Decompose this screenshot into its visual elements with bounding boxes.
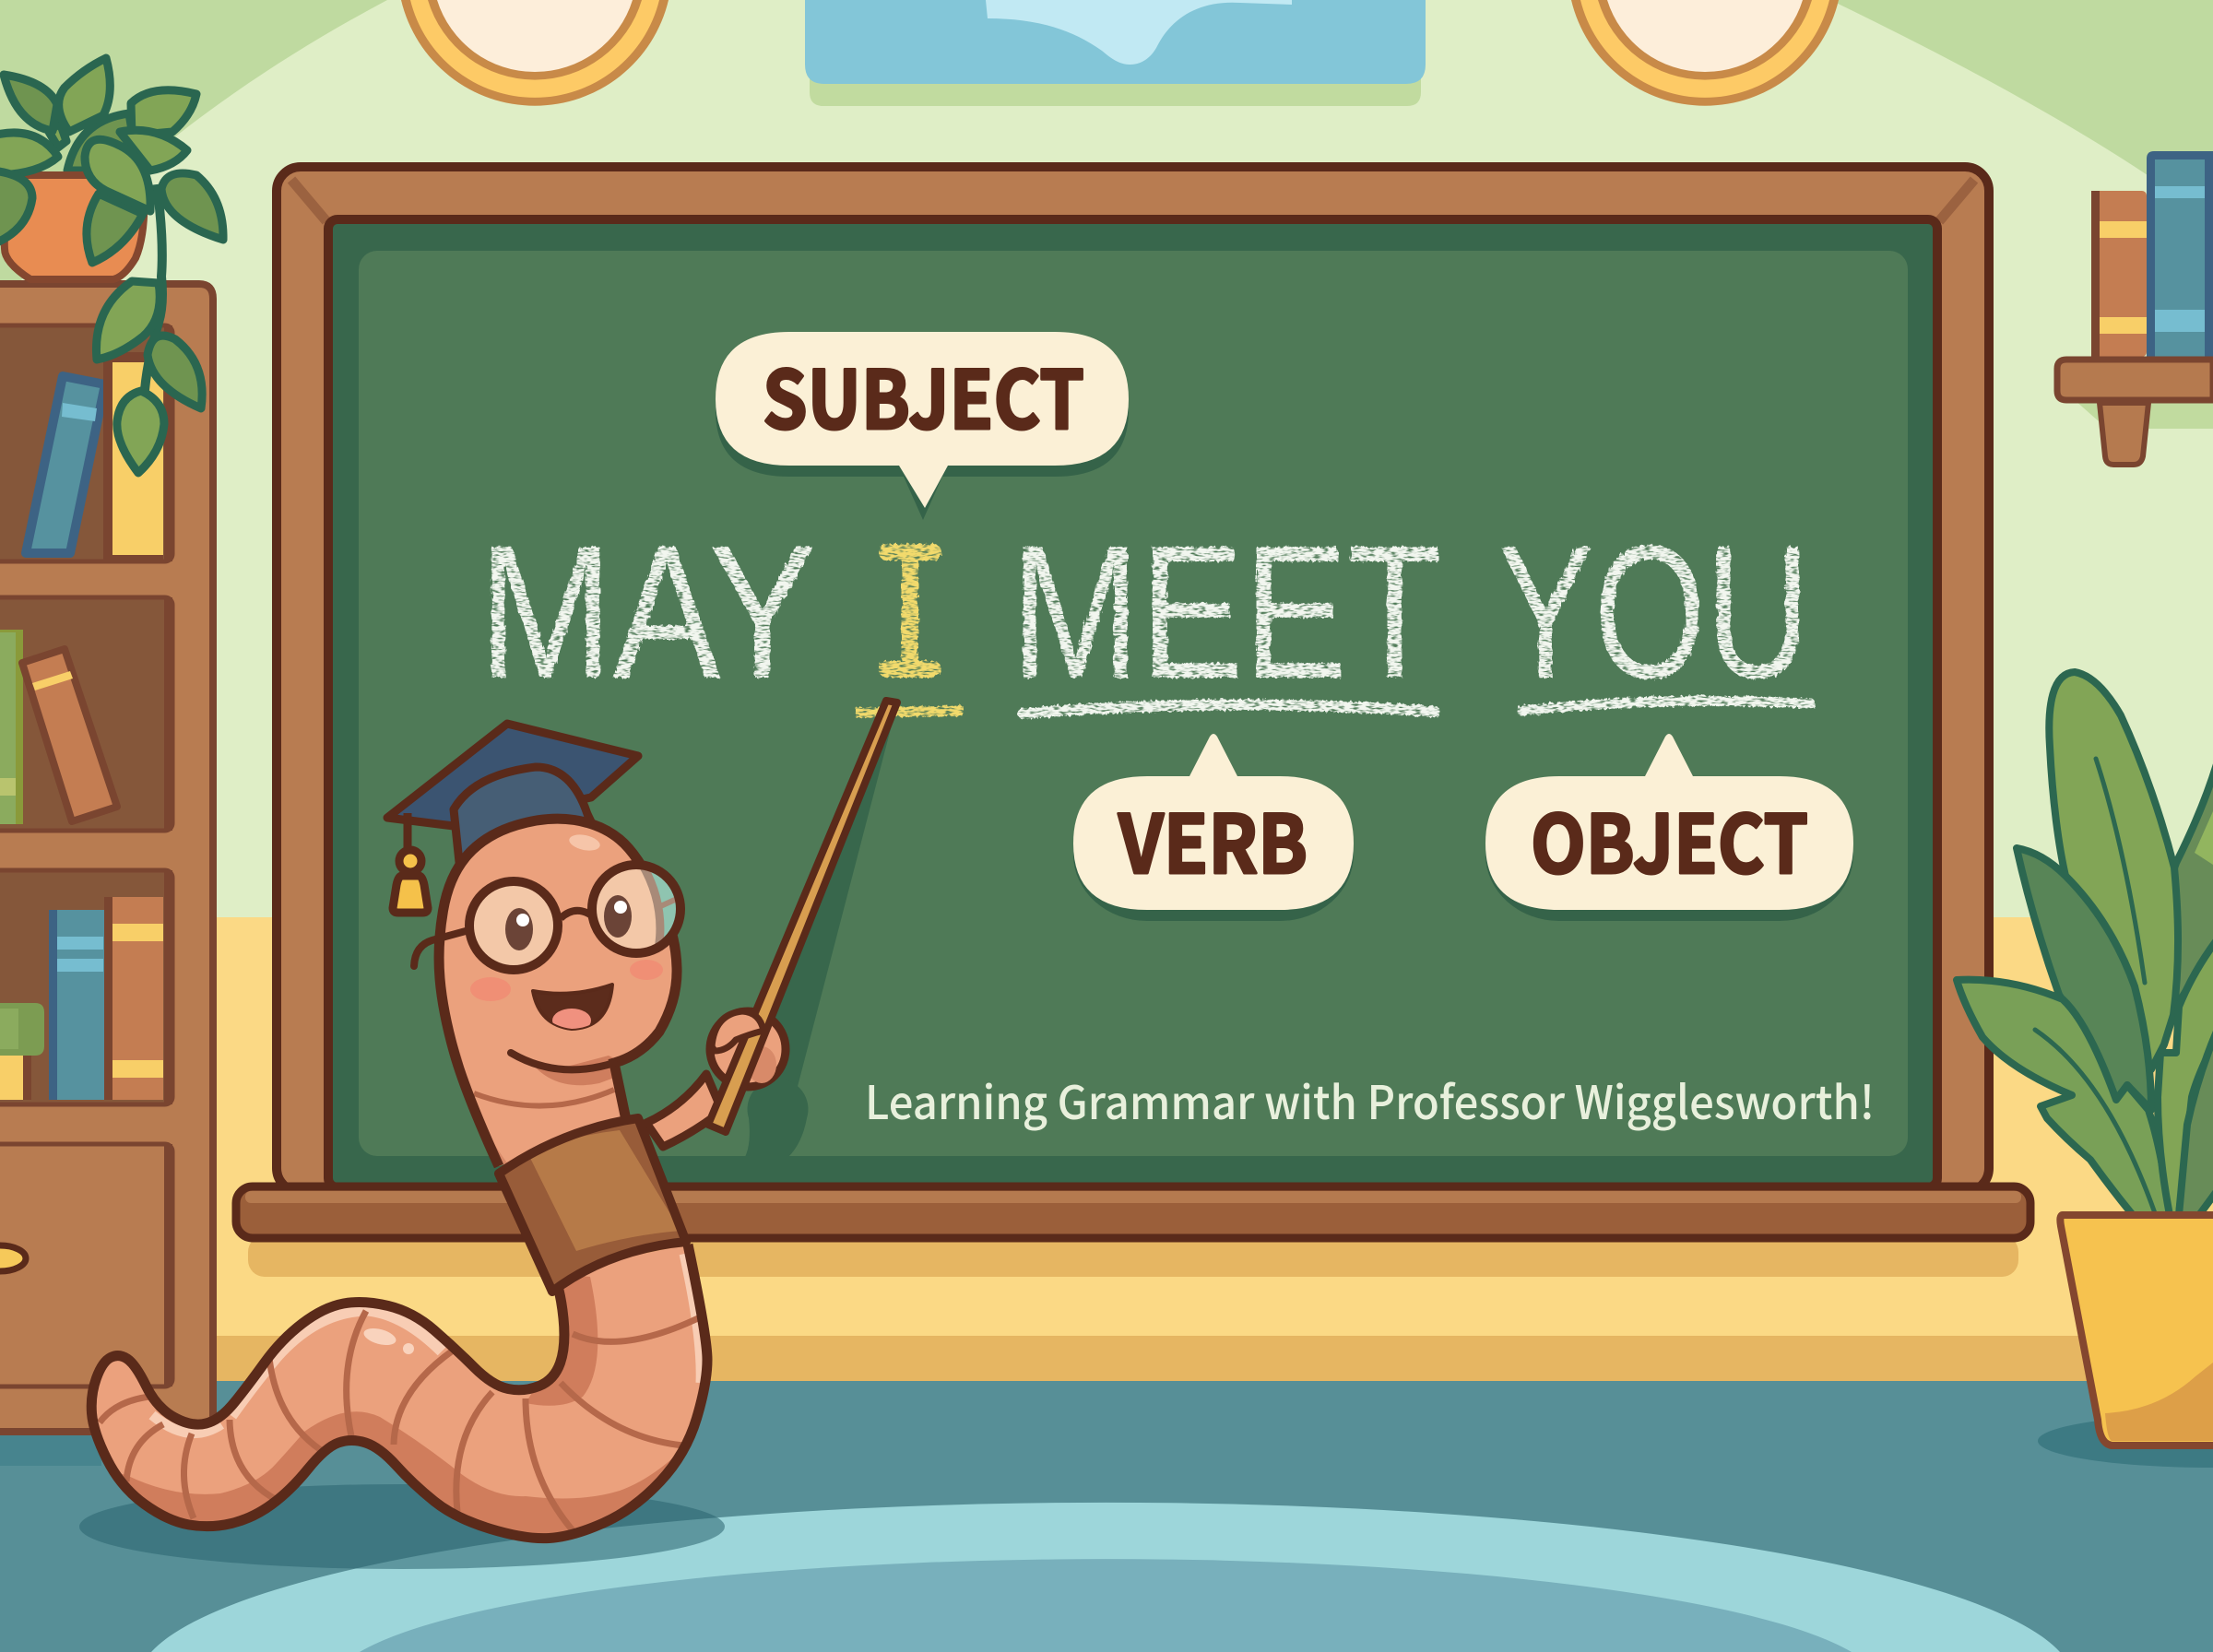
- book band: [0, 778, 16, 796]
- body outline: [91, 1245, 707, 1539]
- book: yellow spine: [103, 352, 163, 560]
- neck ring: [474, 1090, 614, 1106]
- lens left: [469, 881, 558, 970]
- chalk sentence: [479, 506, 1810, 718]
- book: green: [0, 632, 16, 824]
- word: MEET: MEET: [1011, 506, 1442, 718]
- eyes: [505, 895, 632, 950]
- book: flat yellow: [0, 1056, 30, 1100]
- label: OBJECT: [1531, 781, 1808, 897]
- floor: [0, 1381, 2213, 1652]
- tassel knot: [399, 850, 421, 872]
- leaf: centre big: [85, 139, 150, 211]
- picture highlight: [986, 0, 1292, 65]
- shine spots: [363, 1328, 396, 1345]
- leaf: trailing tip: [117, 391, 164, 473]
- tongue: [552, 1009, 591, 1029]
- lens right: [592, 865, 680, 953]
- right potted plant: [1957, 672, 2213, 1446]
- bubble: [1073, 734, 1354, 910]
- segment lines: [100, 1311, 698, 1530]
- mouth: [533, 985, 612, 1032]
- board top: [387, 724, 638, 826]
- arm: [646, 1074, 722, 1147]
- right inner edge: [164, 325, 172, 1386]
- rug: [151, 1503, 2060, 1652]
- book: tilted blue: [26, 376, 105, 553]
- book band: [32, 671, 73, 690]
- worm floor shadow: [79, 1484, 725, 1569]
- leaf: right lower: [2179, 1019, 2213, 1215]
- book: flat green: [0, 1003, 44, 1056]
- chalkboard: [236, 167, 2030, 1277]
- board surface: [328, 219, 1937, 1187]
- terracotta pot: [5, 175, 144, 279]
- forehead shine: [569, 834, 600, 851]
- side shade: [457, 1047, 507, 1166]
- spine: [2091, 191, 2100, 357]
- leaf: far left: [1957, 980, 2170, 1215]
- book bands: [57, 937, 103, 972]
- book: flat yellow edge: [23, 1056, 31, 1100]
- palm shade: [747, 1046, 776, 1083]
- bridge: [561, 911, 590, 918]
- temple arm: [414, 931, 466, 966]
- bubble shadow: [1485, 787, 1853, 921]
- leaf: top: [59, 58, 110, 132]
- worm professor: [83, 701, 897, 1567]
- leaf: trailing right: [148, 336, 202, 408]
- book: tilted brown: [22, 649, 117, 821]
- smile line: [511, 1053, 614, 1069]
- shadow blob: [745, 1079, 808, 1157]
- frame: [277, 167, 1989, 1192]
- collar light panel: [527, 1130, 680, 1251]
- speech bubble: object: [1485, 734, 1853, 921]
- leaf: dark middle: [2017, 848, 2151, 1110]
- round wall portrait left: [401, 0, 669, 106]
- book: olive: [0, 630, 23, 824]
- caption: Learning Grammar with Professor Wigglesworth!: [865, 1067, 1875, 1133]
- board panel: [359, 251, 1908, 1156]
- pot shade: [2105, 1363, 2213, 1441]
- word: YOU: YOU: [1497, 506, 1810, 718]
- highlights: [231, 1309, 443, 1415]
- tassel string: [404, 813, 411, 853]
- cap: mortarboard behind head: [387, 724, 638, 913]
- compartment top: [0, 325, 172, 561]
- leaf: trailing big: [96, 281, 160, 360]
- bubble: [716, 332, 1129, 508]
- bubble shadow: [1073, 787, 1354, 921]
- small diamond leaf: [49, 123, 66, 148]
- bands: [2155, 186, 2205, 332]
- leaf vein: [2096, 759, 2145, 983]
- tray shadow: [248, 1235, 2018, 1277]
- book band: [62, 403, 97, 421]
- speech bubble: subject: [716, 332, 1129, 520]
- hand: [710, 1011, 786, 1087]
- head shading: [457, 834, 615, 1166]
- book spine shade: [49, 910, 57, 1100]
- underline: I: [856, 711, 963, 713]
- bracket: [2100, 403, 2148, 465]
- back leaf dome: [67, 113, 138, 171]
- bands: [2100, 221, 2147, 334]
- shelf board: [2057, 360, 2213, 400]
- leaf accent: [2195, 811, 2213, 865]
- pot shadow: [2038, 1414, 2213, 1468]
- book bands: [112, 924, 163, 1078]
- shelf shadow: [2075, 400, 2213, 429]
- drawer knob: [0, 1245, 26, 1271]
- leaf: far left: [0, 171, 32, 244]
- book: brown: [2091, 191, 2147, 357]
- lens rim: [592, 865, 680, 953]
- bookshelf: [0, 284, 213, 1432]
- lens reflection: [640, 869, 676, 944]
- leaf: tall: [2049, 672, 2178, 1069]
- book: blue: [2147, 151, 2213, 357]
- flat green highlight: [0, 1009, 18, 1049]
- pointer stick: [708, 701, 897, 1132]
- wall picture: [805, 0, 1426, 106]
- wall shelf with books: [2057, 151, 2213, 465]
- book: teal: [49, 910, 104, 1100]
- book cover: [2155, 159, 2205, 357]
- chin shade: [537, 1056, 613, 1086]
- plant: trailing pot plant: [0, 58, 223, 473]
- leaf: right tip: [120, 130, 187, 171]
- speech bubble: verb: [1073, 734, 1354, 921]
- stem: [145, 184, 162, 390]
- tassel: [393, 876, 428, 913]
- collar outline: [499, 1118, 686, 1292]
- underline: YOU: [1521, 701, 1810, 711]
- tray top highlight: [245, 1191, 2021, 1203]
- shelf body: [0, 284, 213, 1432]
- cap skull: [454, 767, 599, 862]
- leaf: under centre: [87, 194, 143, 263]
- leaf: right light: [2158, 933, 2213, 1215]
- leaf: left: [0, 133, 58, 175]
- pot: [2060, 1215, 2213, 1446]
- leaf vein: [2035, 1030, 2155, 1213]
- label: SUBJECT: [763, 336, 1084, 453]
- lower body: [83, 1245, 728, 1567]
- book: yellow: [112, 362, 163, 555]
- compartment lower: [0, 870, 172, 1104]
- leaf: right dark: [2165, 751, 2213, 1007]
- underline: MEET: [1024, 704, 1435, 714]
- book spine shade: [104, 897, 112, 1100]
- label: VERB: [1118, 781, 1308, 897]
- leaf: far right: [161, 173, 223, 240]
- body shading: [98, 1254, 703, 1534]
- word: MAY: MAY: [479, 506, 816, 718]
- bubble: [1485, 734, 1853, 910]
- book: brown: [104, 897, 163, 1100]
- glasses: [414, 857, 692, 970]
- collar band: [499, 1118, 686, 1292]
- inner shade: [526, 1272, 598, 1406]
- fingers: [712, 1011, 763, 1051]
- round wall portrait right: [1571, 0, 1839, 106]
- mitre corners: [291, 180, 1974, 221]
- head and neck: [424, 819, 677, 1175]
- chalk tray: [236, 1186, 2030, 1238]
- shade band: [122, 1411, 671, 1534]
- leaf: top left: [4, 75, 57, 131]
- bubble shadow: [716, 343, 1129, 520]
- cheeks: [470, 960, 663, 1001]
- outline: [439, 819, 677, 1166]
- compartment middle: [0, 597, 172, 831]
- drawer: [0, 1144, 172, 1386]
- pointer shadow on board: [728, 714, 894, 1157]
- leaf: upper right: [131, 90, 196, 136]
- word: I: [887, 552, 933, 669]
